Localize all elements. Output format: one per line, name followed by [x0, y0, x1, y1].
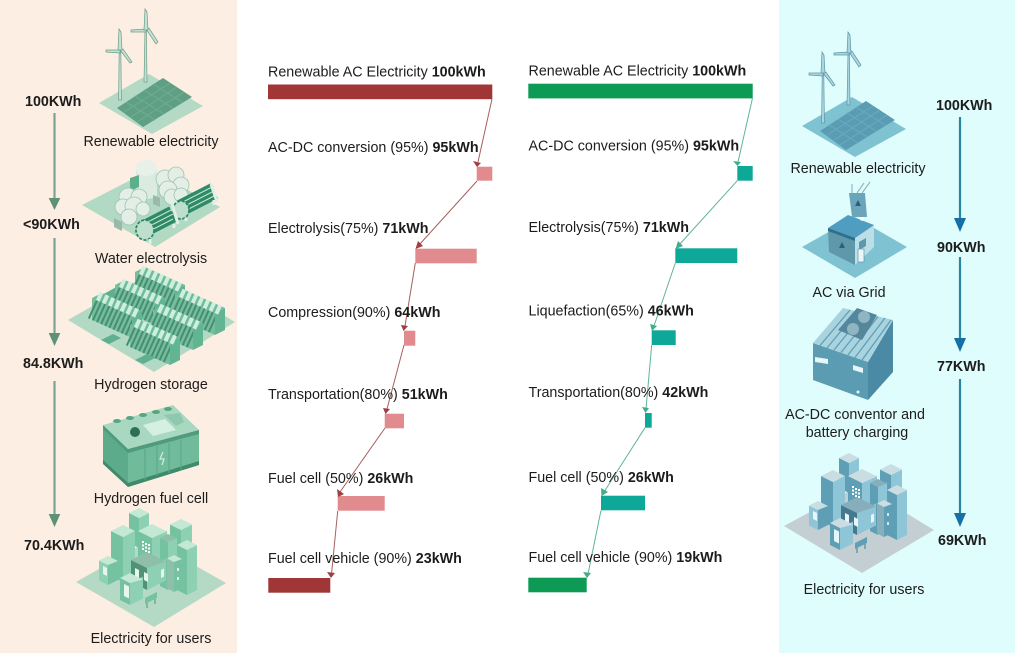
icon: wind turbines and solar panels	[99, 9, 203, 134]
bar: renewable AC electricity	[268, 84, 492, 99]
label: renewable electricity: Renewable electricity	[790, 161, 926, 177]
label: electricity for users: Electricity for users	[91, 631, 211, 647]
chart: hydrogen compression waterfall	[268, 65, 492, 593]
bar: fuel cell vehicle	[268, 578, 330, 593]
text: fuel cell vehicle: Fuel cell vehicle (90%) 19kWh	[528, 550, 722, 566]
text: fuel cell: Fuel cell (50%) 26kWh	[268, 471, 413, 487]
arrow: 77 to 69	[954, 379, 966, 527]
icon: AC-DC converter	[813, 308, 893, 400]
text: electrolysis: Electrolysis(75%) 71kWh	[268, 221, 428, 237]
bar: AC-DC conversion	[477, 167, 492, 181]
arrow: 90 to 77	[954, 257, 966, 352]
label: hydrogen storage: Hydrogen storage	[94, 377, 208, 393]
label: renewable electricity: Renewable electricity	[83, 134, 219, 150]
icon: wind turbines and solar panels	[802, 32, 906, 157]
value: 100KWh: 100KWh	[936, 98, 992, 114]
bar: transportation	[385, 414, 404, 428]
value: under 90KWh: <90KWh	[23, 217, 80, 233]
text: compression: Compression(90%) 64kWh	[268, 305, 440, 321]
text: AC-DC conversion: AC-DC conversion (95%) 95kWh	[268, 140, 479, 156]
text: transportation: Transportation(80%) 51kWh	[268, 387, 448, 403]
text: electrolysis: Electrolysis(75%) 71kWh	[528, 220, 689, 236]
text: fuel cell: Fuel cell (50%) 26kWh	[528, 470, 674, 486]
bar: fuel cell vehicle	[528, 578, 587, 592]
arrow: 100 to 90	[954, 117, 966, 232]
panel: battery pathway energy and stages	[779, 0, 1015, 653]
label: hydrogen fuel cell: Hydrogen fuel cell	[94, 491, 208, 507]
value: 90KWh: 90KWh	[937, 240, 985, 256]
bar: fuel cell	[338, 496, 385, 511]
value: 84.8KWh: 84.8KWh	[23, 356, 83, 372]
value: 77KWh: 77KWh	[937, 359, 985, 375]
arrows: green flow connectors	[583, 98, 752, 578]
arrow: 100 to 90	[49, 113, 60, 210]
text: renewable AC electricity: Renewable AC Electricity 100kWh	[268, 65, 486, 81]
icon: hydrogen fuel cell battery	[103, 405, 199, 487]
arrow: 90 to 84.8	[49, 238, 60, 346]
label: AC-DC conventor and battery charging: AC-DC conventor and	[785, 407, 925, 423]
bar: compression	[404, 331, 415, 346]
icon: hydrogen storage racks	[68, 267, 235, 372]
label: AC via Grid: AC via Grid	[812, 285, 886, 301]
text: AC-DC conversion: AC-DC conversion (95%) 95kWh	[528, 139, 739, 155]
panel: hydrogen pathway energy and stages	[0, 0, 237, 653]
text: renewable AC electricity: Renewable AC Electricity 100kWh	[528, 64, 746, 80]
bar: AC-DC conversion	[737, 166, 753, 181]
text: liquefaction: Liquefaction(65%) 46kWh	[528, 304, 694, 320]
label: water electrolysis: Water electrolysis	[95, 251, 207, 267]
arrow: 84.8 to 70.4	[49, 381, 60, 527]
value: 100KWh: 100KWh	[25, 94, 81, 110]
value: 69KWh: 69KWh	[938, 533, 986, 549]
icon: water electrolysis plant	[82, 160, 220, 247]
label: AC-DC conventor and battery charging	[785, 407, 925, 441]
chart: hydrogen liquefaction waterfall	[528, 64, 753, 592]
bar: transportation	[645, 413, 652, 428]
label: electricity for users: Electricity for users	[804, 582, 924, 598]
value: 70.4KWh: 70.4KWh	[24, 538, 84, 554]
bar: liquefaction	[652, 330, 676, 345]
text: fuel cell vehicle: Fuel cell vehicle (90%) 23kWh	[268, 551, 462, 567]
icon: AC grid substation	[802, 182, 907, 278]
icon: city electricity users	[76, 508, 226, 627]
bar: renewable AC electricity	[528, 84, 753, 98]
text: transportation: Transportation(80%) 42kWh	[528, 385, 708, 401]
arrows: red flow connectors	[327, 99, 492, 578]
label: AC-DC conventor and battery charging: battery charging	[806, 425, 908, 441]
bar: electrolysis	[675, 248, 737, 263]
bar: fuel cell	[601, 496, 645, 510]
icon: city electricity users	[784, 453, 934, 573]
bar: electrolysis	[415, 249, 477, 263]
